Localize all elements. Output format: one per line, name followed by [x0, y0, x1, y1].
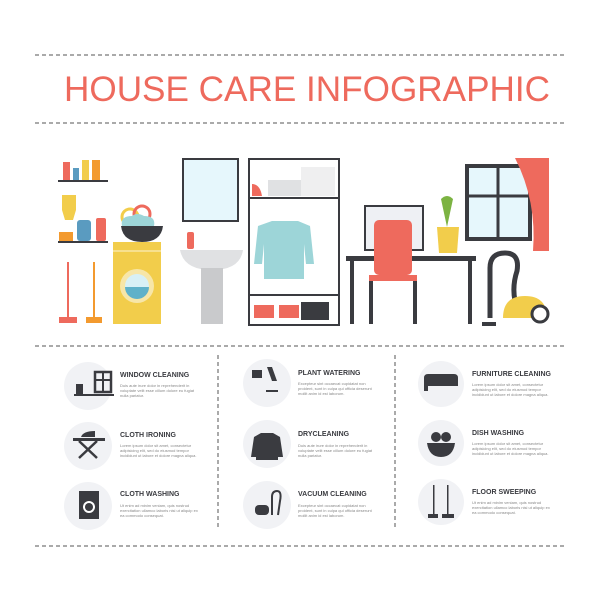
item: cloth ironing: incididunt ut labore et dolore magna aliqua.: [120, 453, 196, 458]
item: cloth ironing: CLOTH IRONING: [120, 432, 177, 439]
item: vacuum cleaning: [243, 481, 373, 529]
item: plant watering: mollit anim id est laborum.: [298, 391, 344, 396]
item: cloth ironing: Lorem ipsum dolor sit amet, consectetur: [120, 443, 192, 448]
item: drycleaning: Duis aute irure dolor in reprehenderit in: [298, 443, 367, 448]
item: drycleaning: nulla pariatur.: [298, 453, 322, 458]
item: plant watering: PLANT WATERING: [298, 370, 361, 377]
item: window cleaning: voluptate velit esse cillum dolore eu fugiat: [120, 388, 195, 393]
vacuum cleaner: [482, 253, 548, 326]
item: furniture cleaning: adipisicing elit, sed do eiusmod tempor: [472, 387, 542, 392]
item: dish washing: adipisicing elit, sed do eiusmod tempor: [472, 446, 542, 451]
item: floor sweeping: exercitation ullamco laboris nisi ut aliquip ex: [472, 505, 550, 510]
item: dish washing: incididunt ut labore et dolore magna aliqua.: [472, 451, 548, 456]
item: floor sweeping: ea commodo consequat.: [472, 510, 516, 515]
item: furniture cleaning: [418, 361, 551, 407]
title: HOUSE CARE INFOGRAPHIC: [64, 70, 550, 109]
brooms: [59, 262, 102, 323]
item: dish washing: [418, 420, 548, 466]
washing machine with basin: [113, 206, 163, 324]
window with curtain: [467, 158, 549, 251]
shelves with bottles: [58, 160, 108, 243]
item: drycleaning: [243, 420, 373, 468]
item: vacuum cleaning: VACUUM CLEANING: [298, 491, 367, 498]
item: cloth washing: Ut enim ad minim veniam, quis nostrud: [120, 503, 189, 508]
item: cloth washing: ea commodo consequat.: [120, 513, 164, 518]
item: window cleaning: nulla pariatur.: [120, 393, 144, 398]
item: drycleaning: DRYCLEANING: [298, 431, 350, 438]
desk, monitor, chair, plant: [346, 196, 476, 324]
item: vacuum cleaning: proident, sunt in culpa qui officia deserunt: [298, 508, 373, 513]
item: cloth ironing: adipisicing elit, sed do eiusmod tempor: [120, 448, 190, 453]
item: cloth washing: [64, 482, 198, 530]
item: cloth washing: CLOTH WASHING: [120, 491, 180, 498]
item: cloth ironing: [64, 422, 196, 470]
item: vacuum cleaning: mollit anim id est laborum.: [298, 513, 344, 518]
mirror and sink: [180, 159, 243, 324]
illustration: room scene: [58, 158, 549, 326]
item: furniture cleaning: incididunt ut labore et dolore magna aliqua.: [472, 392, 548, 397]
item: cloth washing: exercitation ullamco laboris nisi ut aliquip ex: [120, 508, 198, 513]
item: dish washing: Lorem ipsum dolor sit amet, consectetur: [472, 441, 544, 446]
item: plant watering: proident, sunt in culpa qui officia deserunt: [298, 386, 373, 391]
item: window cleaning: Duis aute irure dolor in reprehenderit in: [120, 383, 189, 388]
item: floor sweeping: Ut enim ad minim veniam, quis nostrud: [472, 500, 541, 505]
item: window cleaning: WINDOW CLEANING: [120, 372, 190, 379]
item: floor sweeping: [418, 479, 550, 525]
item: window cleaning: [64, 362, 195, 410]
item: furniture cleaning: FURNITURE CLEANING: [472, 371, 551, 378]
item: furniture cleaning: Lorem ipsum dolor sit amet, consectetur: [472, 382, 544, 387]
item: drycleaning: voluptate velit esse cillum dolore eu fugiat: [298, 448, 373, 453]
item: floor sweeping: FLOOR SWEEPING: [472, 489, 537, 496]
service list: [64, 359, 551, 530]
item: plant watering: [243, 359, 373, 407]
item: dish washing: DISH WASHING: [472, 430, 525, 437]
item: vacuum cleaning: Excepteur sint occaecat cupidatat non: [298, 503, 366, 508]
item: plant watering: Excepteur sint occaecat cupidatat non: [298, 381, 366, 386]
wardrobe: [249, 159, 339, 325]
